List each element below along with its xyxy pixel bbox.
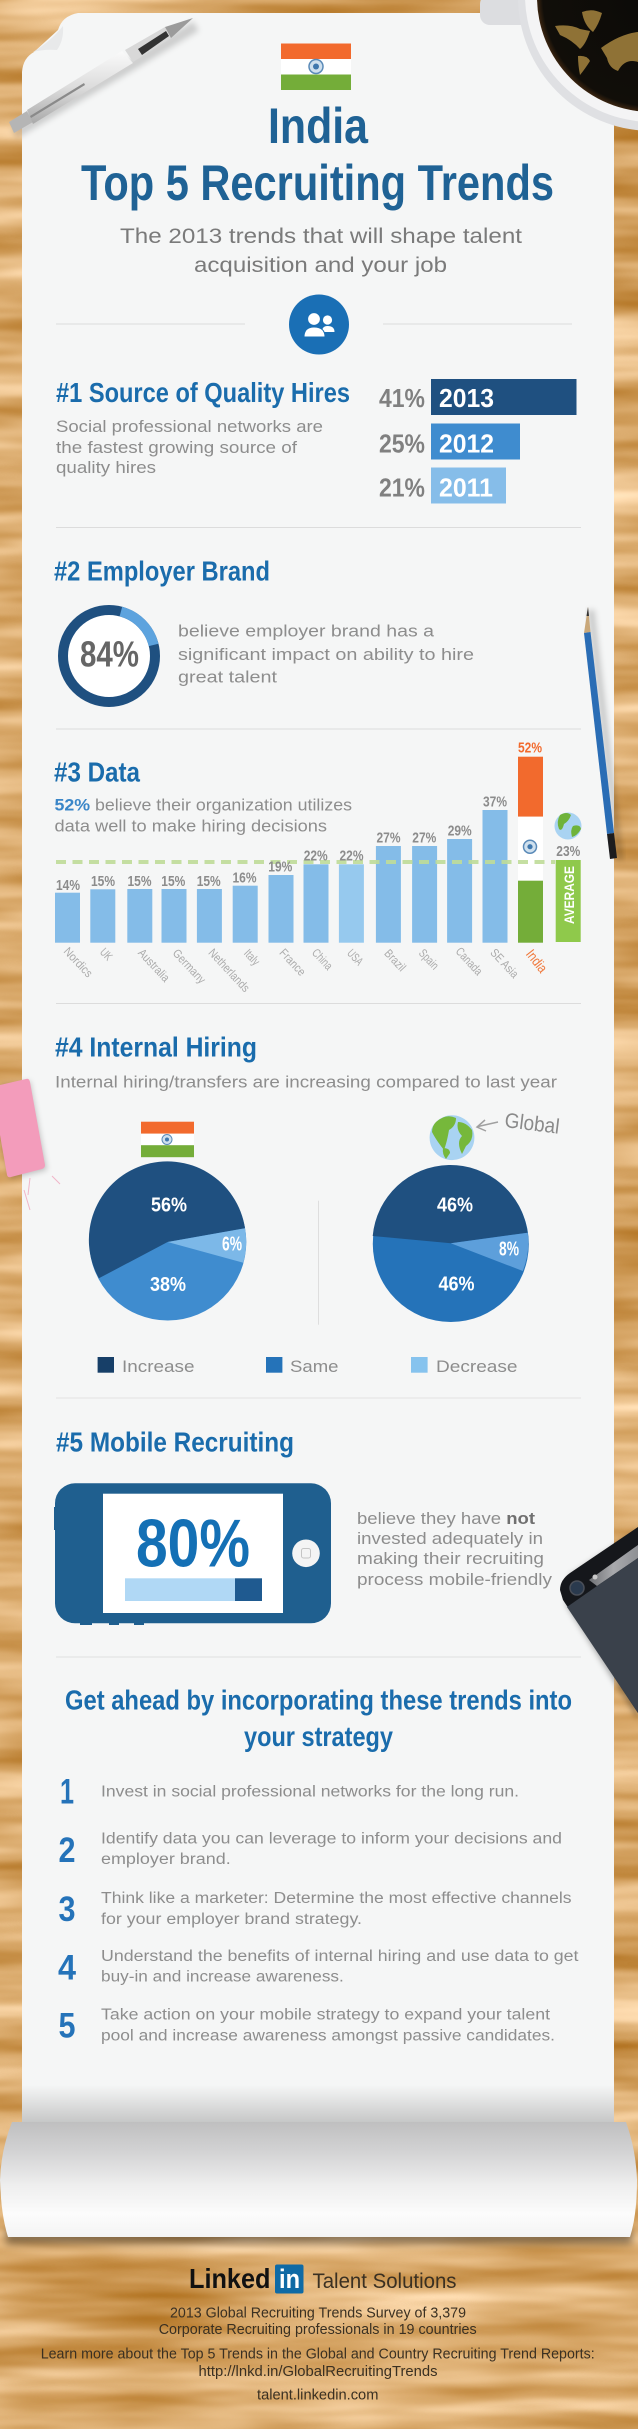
description: significant impact on ability to hire (178, 645, 474, 664)
logo: LinkedIn Talent Solutions (189, 2263, 456, 2294)
description (178, 622, 474, 687)
bar chart: 2013 (439, 383, 494, 413)
icon: pink eraser (0, 1079, 60, 1210)
bar value labels (56, 740, 580, 894)
heading: #4 Internal Hiring (55, 1032, 257, 1063)
heading: your strategy (244, 1721, 394, 1752)
country labels: Canada (453, 944, 486, 978)
item 3: 3 (58, 1890, 76, 1929)
bar value labels: 14% (56, 877, 80, 894)
description: great talent (178, 668, 277, 687)
item 2: Identify data you can leverage to inform your decisions and (101, 1831, 562, 1848)
learn more (41, 2347, 595, 2380)
bar chart (55, 740, 582, 995)
panel: employer brand (54, 556, 474, 702)
logo: LinkedIn Talent Solutions: Linked (189, 2263, 270, 2294)
title: India (268, 98, 369, 154)
item 3 (58, 1890, 572, 1929)
country labels: Brazil (381, 946, 409, 974)
item 1 (60, 1772, 519, 1811)
donut chart: 84% (80, 634, 139, 675)
pie chart: India: 38% (150, 1274, 186, 1296)
icon: pen (9, 18, 196, 134)
description: 52% believe their organization utilizes (54, 796, 352, 815)
heading: Get ahead by incorporating these trends into (65, 1684, 572, 1715)
title: Top 5 Recruiting Trends (81, 155, 554, 211)
pie chart: India: 6% (222, 1234, 242, 1256)
bar value labels: 15% (197, 873, 221, 890)
item 5: 5 (58, 2006, 76, 2046)
logo: LinkedIn Talent Solutions: in (279, 2264, 300, 2294)
bar chart (379, 379, 576, 504)
item 3: for your employer brand strategy. (101, 1911, 362, 1928)
item 1: Invest in social professional networks for the long run. (101, 1784, 519, 1801)
country labels (61, 944, 551, 995)
title (81, 98, 554, 211)
phone graphic: 80% (136, 1506, 250, 1582)
paper roll (0, 2122, 637, 2237)
bar chart: 41% (379, 383, 425, 413)
description: believe they have not (357, 1509, 535, 1528)
donut chart (63, 610, 155, 702)
description: Internal hiring/transfers are increasing compared to last year (55, 1072, 557, 1091)
country labels: Spain (416, 946, 442, 972)
pie chart: global: 46% (438, 1273, 475, 1295)
annotation: Global: Global (503, 1109, 561, 1139)
icon: blue pencil (584, 607, 620, 860)
bar value labels: 15% (91, 873, 115, 890)
panel: mobile recruiting (54, 1427, 553, 1625)
country labels: Nordics (61, 944, 96, 980)
country labels: USA (344, 946, 366, 968)
icon: people (304, 313, 334, 337)
survey source (159, 2306, 477, 2338)
website: talent.linkedin.com (257, 2387, 378, 2403)
subtitle: The 2013 trends that will shape talent (120, 225, 522, 248)
panel: source of quality hires (56, 377, 576, 504)
phone graphic (54, 1483, 331, 1625)
description: process mobile-friendly (357, 1570, 553, 1589)
country labels: Italy (241, 946, 263, 968)
item 4: 4 (58, 1948, 76, 1987)
item 3: Think like a marketer: Determine the most effective channels (101, 1890, 572, 1907)
bar value labels: 15% (128, 873, 152, 890)
bar value labels: 16% (232, 869, 256, 886)
subtitle (120, 225, 522, 277)
learn more: Learn more about the Top 5 Trends in the Global and Country Recruiting Trend Reports: (41, 2347, 595, 2363)
bar value labels: 19% (268, 858, 292, 875)
country labels: UK (97, 945, 115, 963)
country labels: India (523, 946, 551, 976)
legend (98, 1357, 517, 1376)
legend: Decrease (436, 1357, 518, 1376)
bar chart: 21% (379, 473, 425, 503)
bar value labels: 23% (556, 843, 580, 860)
country labels: Germany (170, 946, 209, 986)
bar chart: 25% (379, 429, 425, 459)
India flag bar (518, 757, 543, 943)
description: quality hires (56, 458, 156, 477)
panel: data (54, 740, 582, 995)
icon: globe large (430, 1115, 474, 1160)
annotation: Global (477, 1109, 561, 1139)
item 2: employer brand. (101, 1851, 231, 1868)
panel: strategy recommendations (58, 1684, 579, 2046)
country labels: China (309, 946, 336, 973)
description: believe employer brand has a (178, 622, 435, 641)
legend: Same (290, 1357, 338, 1376)
icon: coffee cup (480, 0, 638, 131)
pie chart: global: 8% (499, 1239, 519, 1261)
survey source: 2013 Global Recruiting Trends Survey of 3,379 (170, 2306, 466, 2322)
country labels: France (277, 946, 309, 979)
subtitle: acquisition and your job (194, 254, 447, 277)
bar value labels: 27% (412, 830, 436, 847)
item 5: Take action on your mobile strategy to expand your talent (101, 2007, 551, 2024)
legend: Increase (122, 1357, 194, 1376)
icon: globe (554, 812, 582, 840)
paper corner fold (33, 26, 63, 52)
average dashed line (56, 860, 555, 864)
description (357, 1509, 553, 1589)
pie chart: global: 46% (437, 1195, 473, 1217)
divider with people icon (56, 294, 572, 354)
flag: India (281, 44, 351, 90)
item 4: buy-in and increase awareness. (101, 1969, 344, 1986)
heading: #5 Mobile Recruiting (56, 1427, 294, 1458)
description (56, 417, 323, 477)
learn more: http://lnkd.in/GlobalRecruitingTrends (198, 2364, 438, 2380)
flag: India small (141, 1122, 194, 1157)
average bar: AVERAGE (561, 866, 577, 924)
bar chart: 2012 (439, 429, 494, 459)
item 5 (58, 2006, 555, 2046)
bar value labels: 52% (518, 740, 542, 757)
description (54, 796, 352, 836)
description: data well to make hiring decisions (54, 817, 327, 836)
item 4: Understand the benefits of internal hiring and use data to get (101, 1948, 579, 1965)
pie chart: global (373, 1165, 529, 1322)
item 5: pool and increase awareness amongst passive candidates. (101, 2028, 555, 2045)
description: the fastest growing source of (56, 438, 297, 457)
paper roll shadow (6, 2228, 632, 2244)
average bar (556, 860, 581, 942)
bar value labels: 22% (340, 848, 364, 865)
bar value labels: 29% (448, 823, 472, 840)
country labels: Netherlands (206, 946, 253, 995)
pie chart: India (89, 1161, 246, 1320)
panel: internal hiring (55, 1032, 561, 1376)
description: invested adequately in (357, 1529, 543, 1548)
pie chart: India: 56% (151, 1195, 187, 1217)
country labels: Australia (135, 946, 173, 985)
heading: #3 Data (54, 757, 140, 788)
item 4 (58, 1948, 579, 1987)
footer (41, 2263, 595, 2403)
country labels: SE Asia (487, 946, 522, 981)
paper shadow above roll (22, 2085, 614, 2124)
logo: LinkedIn Talent Solutions: Talent Solutions (312, 2269, 456, 2293)
item 1: 1 (60, 1772, 74, 1811)
heading (65, 1684, 572, 1752)
bar value labels: 37% (483, 794, 507, 811)
item 2 (58, 1831, 562, 1870)
heading: #2 Employer Brand (54, 556, 270, 587)
coffee world map (555, 10, 638, 75)
bar value labels: 22% (304, 848, 328, 865)
bar value labels: 15% (161, 873, 185, 890)
item 2: 2 (58, 1831, 76, 1870)
heading: #1 Source of Quality Hires (56, 377, 350, 408)
bar chart: 2011 (439, 473, 493, 503)
description: Social professional networks are (56, 417, 323, 436)
description: making their recruiting (357, 1549, 544, 1568)
survey source: Corporate Recruiting professionals in 19 countries (159, 2322, 477, 2338)
bar value labels: 27% (376, 830, 400, 847)
icon: smartphone on desk (560, 1527, 638, 1720)
